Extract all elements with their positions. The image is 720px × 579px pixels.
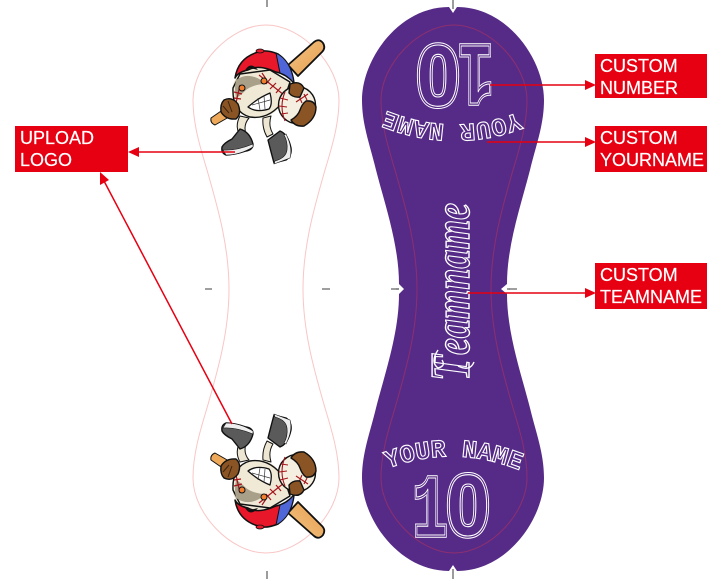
purple hat panel	[362, 7, 544, 571]
inner seam line	[381, 25, 527, 553]
number bottom: 0	[446, 457, 490, 554]
label: upload logo	[15, 126, 128, 172]
mascot logo bottom	[211, 414, 324, 538]
label: custom teamname	[595, 263, 707, 309]
teamname: Teamname	[420, 203, 482, 381]
mascot logo top	[211, 40, 324, 164]
crop ticks	[205, 0, 517, 579]
label: upload logo: UPLOAD	[20, 128, 94, 148]
label: custom number: CUSTOM	[600, 56, 678, 76]
arrow: yourname	[487, 137, 596, 147]
name top: YOUR NAME	[382, 110, 524, 142]
label: custom number	[595, 54, 707, 98]
number top	[416, 19, 493, 124]
label: custom number: NUMBER	[600, 78, 678, 98]
label: custom yourname: CUSTOM	[600, 128, 678, 148]
label: custom teamname: TEAMNAME	[600, 287, 702, 307]
label: custom teamname: CUSTOM	[600, 265, 678, 285]
number top: 0	[416, 27, 460, 124]
number bottom: 1	[413, 464, 447, 562]
label: custom yourname	[595, 126, 707, 172]
tick over side notches	[396, 288, 510, 290]
arrow: teamname	[468, 288, 596, 298]
number bottom: 0	[446, 457, 490, 554]
number top: 1	[459, 19, 493, 117]
arrow: logo	[128, 147, 235, 157]
number top: 1	[459, 19, 493, 117]
name bottom: YOUR NAME	[382, 440, 524, 470]
arrow: logo diagonal	[100, 172, 232, 424]
arrow: number	[490, 80, 596, 90]
left outline template	[193, 25, 339, 553]
number bottom	[413, 457, 490, 562]
number top: 0	[416, 27, 460, 124]
label: custom yourname: YOURNAME	[600, 150, 704, 170]
label: upload logo: LOGO	[20, 150, 72, 170]
number bottom: 1	[413, 464, 447, 562]
number top: 1	[459, 19, 493, 117]
number bottom: 0	[446, 457, 490, 554]
number bottom: 1	[413, 464, 447, 562]
number top: 0	[416, 27, 460, 124]
